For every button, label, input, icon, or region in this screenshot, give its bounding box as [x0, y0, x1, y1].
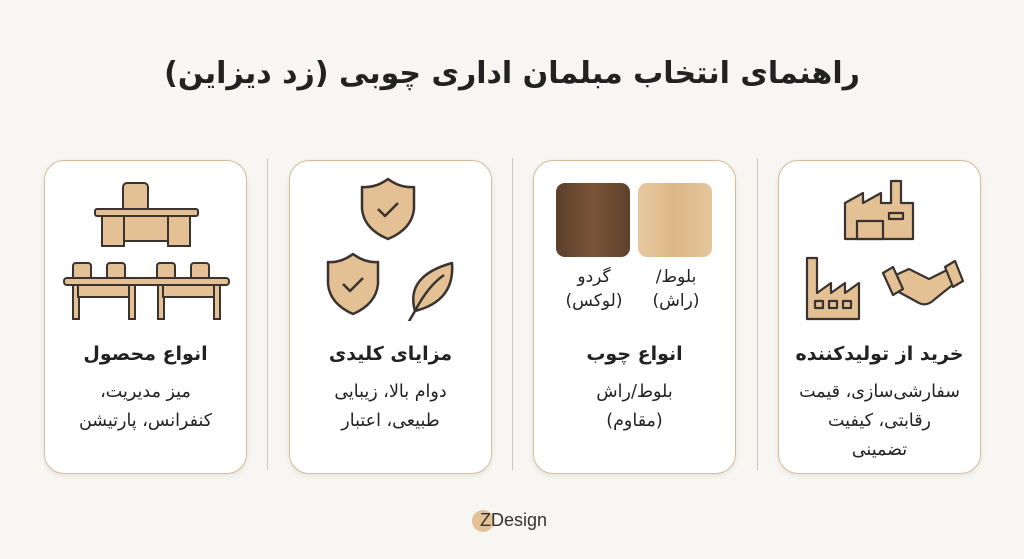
heading: خرید از تولیدکننده	[796, 343, 963, 365]
body text: دوام بالا، زیبایی	[334, 382, 447, 402]
panel: buy from manufacturer	[778, 160, 981, 474]
swatch labels: (لوکس)	[566, 291, 622, 311]
body text: بلوط/راش	[596, 382, 673, 402]
body text	[79, 382, 212, 431]
heading: انواع چوب	[586, 343, 683, 365]
swatch: walnut	[556, 183, 630, 257]
body text: سفارشی‌سازی، قیمت	[799, 382, 960, 402]
swatch labels: گردو	[577, 267, 611, 287]
swatch: oak	[638, 183, 712, 257]
body text	[596, 382, 673, 431]
swatch labels	[566, 266, 622, 311]
heading: مزایای کلیدی	[329, 343, 452, 365]
body text: (مقاوم)	[606, 411, 663, 431]
body text	[799, 382, 960, 460]
logo: ZDesign	[480, 510, 547, 530]
body text	[334, 382, 447, 431]
title: راهنمای انتخاب مبلمان اداری چوبی (زد دیزاین)	[164, 56, 860, 91]
body text: رقابتی، کیفیت	[828, 411, 931, 431]
panel: wood types	[533, 160, 736, 474]
body text: طبیعی، اعتبار	[341, 411, 440, 431]
panel: key benefits	[289, 160, 492, 474]
body text: میز مدیریت،	[100, 382, 191, 402]
body text: تضمینی	[852, 440, 907, 460]
panel: product types	[44, 160, 247, 474]
icon: factories and handshake	[806, 180, 964, 320]
body text: کنفرانس، پارتیشن	[79, 411, 212, 431]
panel: wood types: (راش)	[653, 291, 699, 311]
icon: shields and leaf	[326, 178, 454, 321]
panel: wood types: بلوط/	[656, 267, 696, 287]
heading: انواع محصول	[83, 343, 208, 365]
icon: desks	[63, 182, 230, 320]
